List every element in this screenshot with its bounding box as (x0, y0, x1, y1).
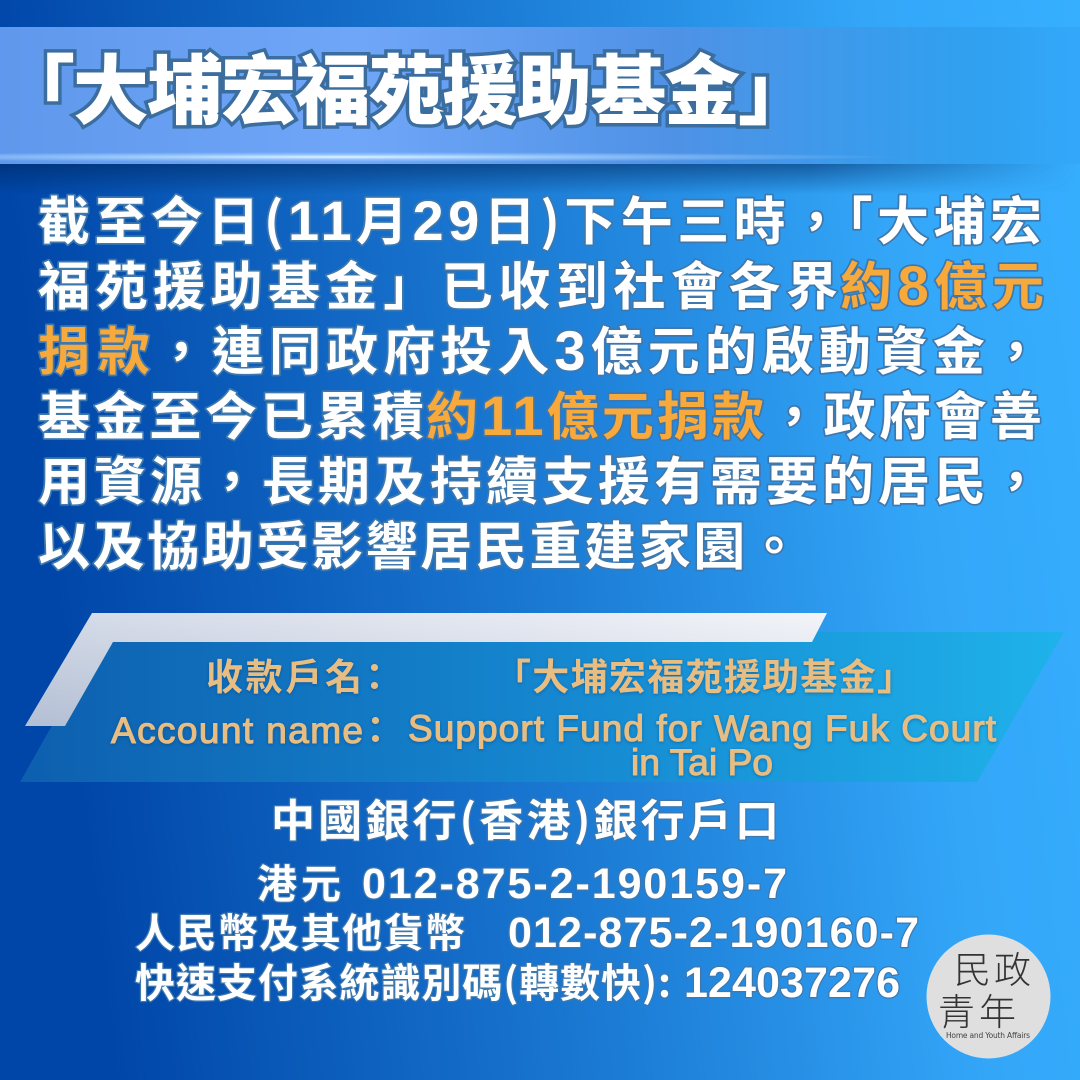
logo: Home and Youth Affairs: Home and Youth Affairs (946, 1031, 1030, 1040)
bank account details: 人民幣及其他貨幣 (135, 901, 465, 959)
panel: teal front shape (20, 632, 1064, 782)
body paragraph: ，政府會善 (768, 375, 1042, 450)
logo: Home and Youth Affairs (926, 934, 1050, 1058)
account name English label: Account name (111, 710, 363, 751)
bank account details: 012-875-2-190160-7 (508, 909, 919, 957)
account name English value: Support Fund for Wang Fuk Court (408, 708, 997, 749)
logo: Home and Youth Affairs: 民 (954, 940, 991, 994)
account name English label: ： (357, 700, 394, 754)
bank account details (135, 852, 919, 1009)
account name English value line 2: in Tai Po (631, 742, 773, 783)
logo: Home and Youth Affairs: 青 (938, 982, 975, 1036)
body paragraph: 用資源，長期及持續支援有需要的居民， (38, 440, 1042, 515)
bank account details: 012-875-2-190159-7 (362, 860, 787, 908)
account name Chinese value: 「大埔宏福苑援助基金」 (494, 647, 914, 701)
body paragraph: 約11億元捐款 (426, 375, 764, 450)
body paragraph: 約8億元 (840, 245, 1044, 320)
account name Chinese label: 收款戶名 (206, 647, 362, 701)
body paragraph: 捐款 (38, 310, 150, 385)
bank account details: 港元 (257, 852, 341, 910)
title: 「大埔宏福苑援助基金」 (0, 30, 814, 140)
account name Chinese label: ： (356, 647, 393, 701)
account panel (20, 613, 1064, 783)
body paragraph: 基金至今已累積 (38, 375, 424, 450)
logo: Home and Youth Affairs: 年 (979, 982, 1016, 1036)
header band (0, 27, 1080, 194)
body paragraph: 福苑援助基金」已收到社會各界 (38, 245, 838, 320)
body paragraph (38, 180, 1044, 580)
body paragraph: 以及協助受影響居民重建家園。 (38, 505, 800, 580)
bank account details: 124037276 (684, 959, 900, 1007)
bank account details: 快速支付系統識別碼(轉數快): (135, 951, 671, 1009)
panel: silver back shape (25, 613, 827, 726)
bank heading: 中國銀行(香港)銀行戶口 (271, 785, 779, 849)
body paragraph: 截至今日(11月29日)下午三時，「大埔宏 (38, 180, 1042, 255)
body paragraph: ，連同政府投入3億元的啟動資金， (155, 310, 1042, 385)
logo: Home and Youth Affairs: 政 (994, 940, 1031, 994)
account name English label (111, 700, 394, 754)
